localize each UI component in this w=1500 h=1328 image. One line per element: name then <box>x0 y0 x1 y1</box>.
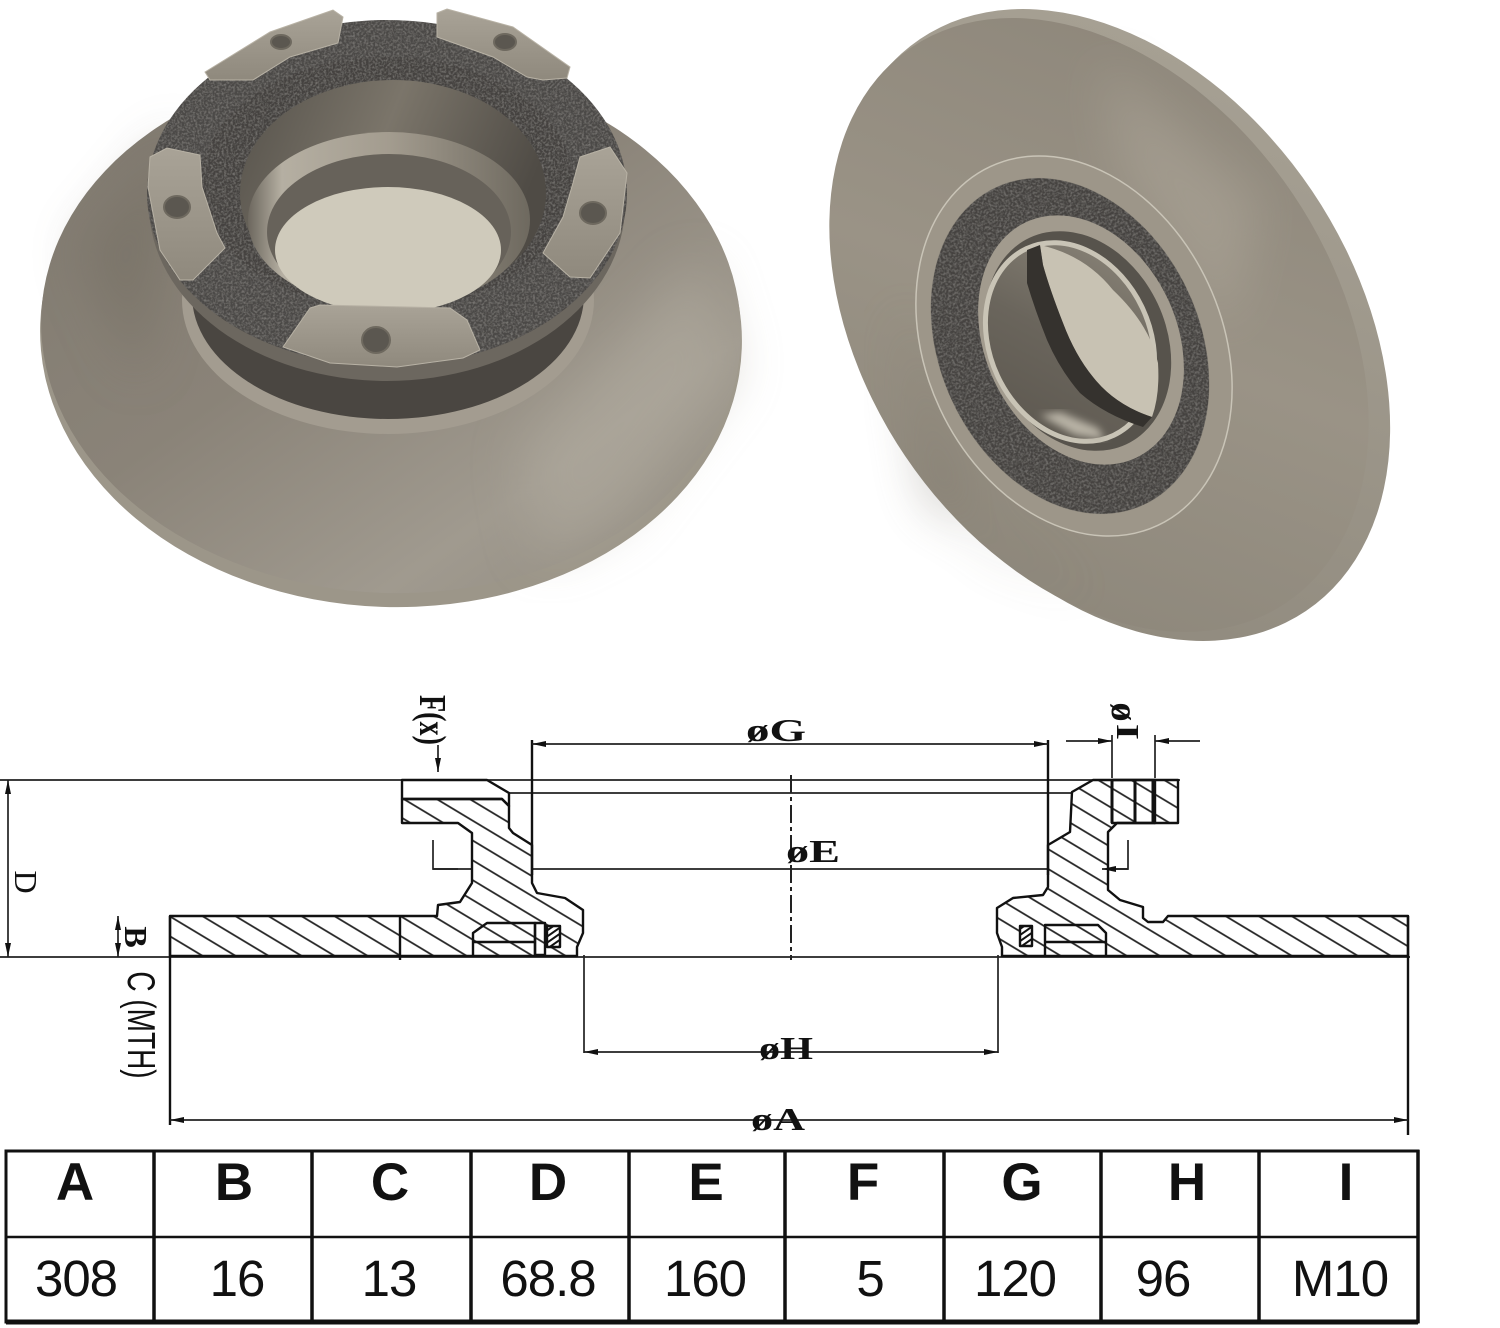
bore highlight <box>1040 412 1105 440</box>
silver seat <box>939 182 1223 498</box>
hub underside lip <box>149 29 625 381</box>
table header letters <box>56 1153 1353 1212</box>
bowl <box>240 80 546 306</box>
lower hub cylinder <box>182 166 594 434</box>
center opening <box>275 187 501 313</box>
bolt hole <box>1112 780 1178 823</box>
mounting pads <box>148 9 627 367</box>
table header letters: A <box>56 1153 94 1212</box>
reference lines <box>0 780 1410 957</box>
dimension F label and arrow: F(x) <box>411 695 453 745</box>
dimension E <box>433 833 1128 869</box>
disc face <box>32 51 750 605</box>
table header letters: I <box>1339 1153 1353 1212</box>
dimension I <box>1066 702 1200 778</box>
dimension H: øH <box>759 1030 813 1066</box>
right pocket <box>1020 925 1106 955</box>
photo: brake disc rear side <box>718 0 1500 745</box>
dimension G <box>532 712 1048 875</box>
light through bore <box>1040 245 1158 417</box>
face <box>718 0 1480 734</box>
table values: 96 <box>1136 1250 1190 1307</box>
table header letters: C <box>371 1153 409 1212</box>
specification table <box>6 1150 1418 1323</box>
hub flange casting <box>147 20 627 366</box>
table values: M10 <box>1292 1250 1388 1307</box>
table values: 13 <box>362 1250 416 1307</box>
dimension D: D <box>8 870 44 894</box>
bolt holes <box>164 34 606 353</box>
table header letters: D <box>529 1153 567 1212</box>
photo: brake disc hub side <box>31 9 751 619</box>
dimension F label and arrow <box>411 695 453 772</box>
dimension C label: C (MTH) <box>119 971 163 1079</box>
dimension G: øG <box>746 712 806 748</box>
table header letters: G <box>1001 1153 1043 1212</box>
dimension B: B <box>118 926 154 948</box>
left pocket <box>473 923 560 955</box>
dimension B <box>118 916 154 957</box>
table header letters: H <box>1168 1153 1206 1212</box>
dimension E: øE <box>786 833 840 869</box>
dark band <box>1027 245 1152 427</box>
table values: 5 <box>856 1250 884 1307</box>
dimension I: I <box>1109 724 1145 740</box>
cast dark ring <box>878 132 1262 560</box>
inner bore wall <box>954 215 1186 469</box>
table header letters: B <box>215 1153 253 1212</box>
flange white top left <box>402 780 509 806</box>
flange ring <box>856 104 1292 588</box>
rim <box>721 0 1500 745</box>
table values: 120 <box>974 1250 1056 1307</box>
disc and hub left section <box>170 799 583 956</box>
dimension H <box>584 955 998 1066</box>
table values: 68.8 <box>500 1250 596 1307</box>
table grid <box>6 1150 1418 1323</box>
table values: 308 <box>35 1250 117 1307</box>
dimension A: øA <box>751 1101 805 1137</box>
table values <box>35 1250 1388 1307</box>
brushed streaks <box>900 60 1260 600</box>
disc rim <box>31 53 751 619</box>
center line <box>790 775 792 960</box>
disc thickness lines <box>170 916 1408 1135</box>
brushed highlights <box>80 130 735 560</box>
technical drawing: cross section <box>0 695 1410 1137</box>
table values: 160 <box>664 1250 746 1307</box>
table header letters: E <box>688 1153 724 1212</box>
rough casting ring <box>201 57 573 309</box>
silver ring <box>248 132 530 308</box>
table values: 16 <box>210 1250 264 1307</box>
disc and hub right section <box>997 780 1408 956</box>
dimension I: ø <box>1103 702 1145 722</box>
table header letters: F <box>847 1153 879 1212</box>
